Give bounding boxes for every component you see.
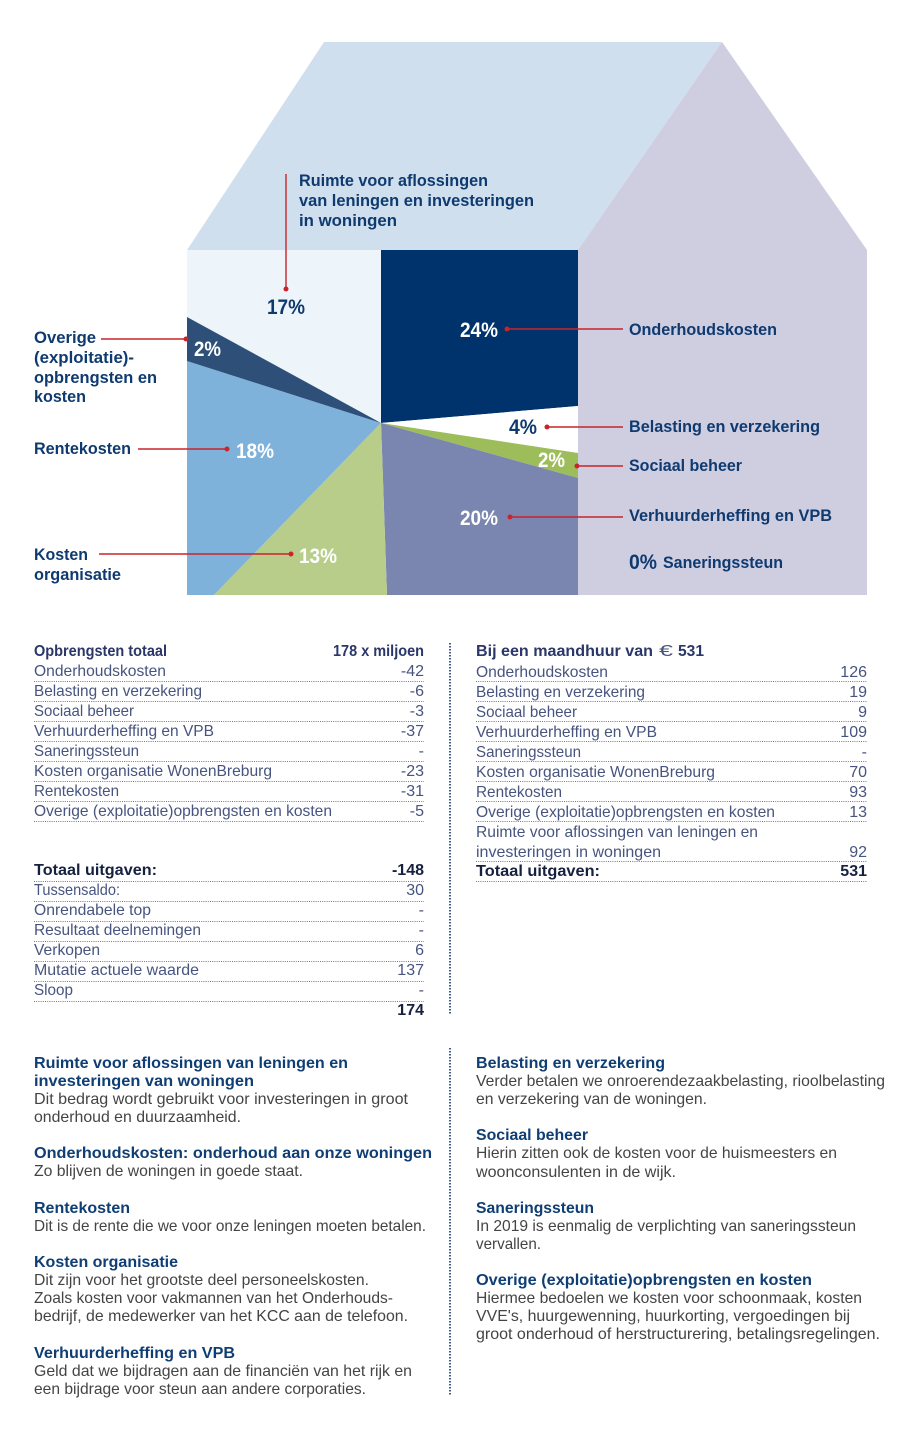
text block: kosten organisatie: Dit zijn voor het grootste deel personeelskosten.: [34, 1272, 369, 1289]
table: maandhuur: 109: [840, 724, 867, 741]
pie slice: belasting 4%: [381, 406, 578, 453]
table: opbrengsten: [34, 643, 424, 1019]
percentage labels: 20%: [460, 507, 498, 530]
table: opbrengsten: -: [419, 982, 424, 999]
text block: belasting en verzekering: en verzekering van de woningen.: [476, 1091, 707, 1108]
table: maandhuur: 126: [840, 664, 867, 681]
table: opbrengsten: 30: [406, 882, 424, 899]
table: opbrengsten: -6: [410, 683, 424, 700]
table: maandhuur: Sociaal beheer: [476, 704, 578, 721]
table: opbrengsten: -31: [401, 783, 424, 800]
roof label: ruimte voor aflossingen: van leningen en investeringen: [299, 191, 534, 210]
right pie labels: Onderhoudskosten: [629, 320, 777, 339]
text block: onderhoudskosten: Zo blijven de woningen in goede staat.: [34, 1163, 303, 1180]
roof label: ruimte voor aflossingen: Ruimte voor aflossingen: [299, 171, 488, 190]
percentage labels: 4%: [509, 416, 537, 439]
table: opbrengsten: -: [419, 902, 424, 919]
percentage labels: 24%: [460, 319, 498, 342]
table: opbrengsten: 6: [415, 942, 424, 959]
text block: sociaal beheer: Hierin zitten ook de kosten voor de huismeesters en: [476, 1145, 837, 1162]
table: maandhuur: 70: [849, 764, 867, 781]
table: opbrengsten: -37: [401, 723, 424, 740]
table: maandhuur: 531: [678, 643, 704, 660]
right pie labels: Verhuurderheffing en VPB: [629, 506, 832, 525]
table: maandhuur: Belasting en verzekering: [476, 684, 645, 701]
right pie labels: Sociaal beheer: [629, 456, 742, 475]
divider: explanations: [449, 1048, 451, 1396]
table: opbrengsten: Rentekosten: [34, 783, 119, 800]
table: opbrengsten: Saneringssteun: [34, 743, 139, 760]
table: maandhuur: -: [862, 744, 867, 761]
table: opbrengsten: -5: [410, 803, 424, 820]
text block: onderhoudskosten: Onderhoudskosten: onderhoud aan onze woningen: [34, 1145, 432, 1162]
text block: ruimte voor aflossingen: [34, 1055, 409, 1126]
text block: belasting en verzekering: [476, 1055, 885, 1108]
percentage labels: 17%: [267, 296, 305, 319]
table: maandhuur: 92: [849, 844, 867, 861]
table: opbrengsten: 137: [397, 962, 424, 979]
left pie labels: opbrengsten en: [34, 368, 157, 387]
pie slice: sociaal beheer 2%: [381, 423, 578, 478]
text block: ruimte voor aflossingen: Ruimte voor aflossingen van leningen en: [34, 1055, 348, 1072]
explanations: right column: [475, 1055, 885, 1343]
left pie labels: (exploitatie)-: [34, 348, 134, 367]
pie slice: rentekosten 18%: [187, 361, 381, 595]
red leader lines: [99, 174, 623, 556]
table: maandhuur: 93: [849, 784, 867, 801]
table: opbrengsten: 178 x miljoen: [333, 643, 424, 660]
left pie labels: Rentekosten: [34, 439, 131, 458]
text block: kosten organisatie: Zoals kosten voor vakmannen van het Onderhouds-: [34, 1290, 393, 1307]
table: maandhuur: Saneringssteun: [476, 744, 581, 761]
table: opbrengsten: Mutatie actuele waarde: [34, 962, 199, 979]
text block: sociaal beheer: Sociaal beheer: [476, 1127, 588, 1144]
table: maandhuur: Rentekosten: [476, 784, 562, 801]
text block: saneringssteun: Saneringssteun: [476, 1200, 594, 1217]
roof label: ruimte voor aflossingen: in woningen: [299, 211, 397, 230]
text block: overige: Overige (exploitatie)opbrengsten en kosten: [476, 1272, 812, 1289]
pie slice: kosten organisatie 13%: [214, 423, 387, 595]
text block: overige: VVE's, huurgewenning, huurkorting, vergoedingen bij: [476, 1308, 850, 1325]
table: opbrengsten: -3: [410, 703, 424, 720]
text block: rentekosten: [34, 1200, 426, 1235]
text block: saneringssteun: vervallen.: [476, 1236, 541, 1253]
table: maandhuur: Ruimte voor aflossingen van leningen en: [476, 824, 758, 841]
house: right side wall: [578, 42, 867, 595]
text block: overige: Hiermee bedoelen we kosten voor schoonmaak, kosten: [476, 1290, 862, 1307]
percentage labels: 13%: [299, 545, 337, 568]
left pie labels: Kosten: [34, 545, 88, 564]
pie slice: verhuurderheffing 20%: [381, 423, 578, 595]
text block: belasting en verzekering: Belasting en verzekering: [476, 1055, 665, 1072]
text block: kosten organisatie: bedrijf, de medewerker van het KCC aan de telefoon.: [34, 1308, 408, 1325]
table: maandhuur: 19: [849, 684, 867, 701]
text block: kosten organisatie: Kosten organisatie: [34, 1254, 178, 1271]
table: opbrengsten: Kosten organisatie WonenBreburg: [34, 763, 272, 780]
table: opbrengsten: Tussensaldo:: [34, 882, 120, 899]
pie slice: overige 2%: [187, 317, 381, 423]
text block: ruimte voor aflossingen: onderhoud en duurzaamheid.: [34, 1109, 241, 1126]
table: maandhuur: investeringen in woningen: [476, 844, 661, 861]
table: maandhuur: [476, 643, 867, 882]
pie slice: onderhoudskosten 24%: [381, 250, 578, 423]
table: opbrengsten: Verkopen: [34, 942, 100, 959]
roof: left plane: [187, 42, 722, 250]
house with pie chart: [187, 42, 867, 595]
text block: overige: groot onderhoud of herstructurering, betalingsregelingen.: [476, 1326, 880, 1343]
roof label: ruimte voor aflossingen: [299, 171, 534, 230]
text block: rentekosten: Rentekosten: [34, 1200, 130, 1217]
table: opbrengsten: Overige (exploitatie)opbrengsten en kosten: [34, 803, 332, 820]
left pie labels: Overige: [34, 328, 96, 347]
table: opbrengsten: Onrendabele top: [34, 902, 151, 919]
table: maandhuur: Kosten organisatie WonenBreburg: [476, 764, 715, 781]
table: opbrengsten: Totaal uitgaven:: [34, 862, 157, 879]
table: maandhuur: Onderhoudskosten: [476, 664, 608, 681]
text block: verhuurderheffing: Geld dat we bijdragen aan de financiën van het rijk en: [34, 1363, 412, 1380]
percentage labels: [194, 296, 565, 568]
table: maandhuur: 9: [858, 704, 867, 721]
table: maandhuur: Bij een maandhuur van: [476, 643, 653, 660]
text block: verhuurderheffing: Verhuurderheffing en VPB: [34, 1345, 235, 1362]
percentage labels: 2%: [194, 338, 221, 361]
table: maandhuur: 13: [849, 804, 867, 821]
text block: saneringssteun: In 2019 is eenmalig de verplichting van saneringssteun: [476, 1218, 856, 1235]
percentage labels: 18%: [236, 440, 274, 463]
table: opbrengsten: -23: [401, 763, 424, 780]
text block: rentekosten: Dit is de rente die we voor onze leningen moeten betalen.: [34, 1218, 426, 1235]
table: maandhuur: Verhuurderheffing en VPB: [476, 724, 657, 741]
left pie labels: organisatie: [34, 565, 121, 584]
table: opbrengsten: -42: [401, 663, 424, 680]
table: opbrengsten: Belasting en verzekering: [34, 683, 202, 700]
text block: belasting en verzekering: Verder betalen we onroerendezaakbelasting, rioolbelasting: [476, 1073, 885, 1090]
explanations: left column: [34, 1055, 432, 1398]
table: opbrengsten: Resultaat deelnemingen: [34, 922, 201, 939]
table: opbrengsten: 174: [397, 1002, 424, 1019]
right pie labels: 0%: [629, 551, 657, 574]
table: opbrengsten: Opbrengsten totaal: [34, 643, 167, 660]
table: opbrengsten: Sloop: [34, 982, 73, 999]
table: opbrengsten: Sociaal beheer: [34, 703, 135, 720]
text block: verhuurderheffing: een bijdrage voor steun aan andere corporaties.: [34, 1381, 366, 1398]
percentage labels: 2%: [538, 449, 565, 472]
table: opbrengsten: -: [419, 743, 424, 760]
pie slice: ruimte 17%: [187, 250, 381, 423]
table: opbrengsten: Verhuurderheffing en VPB: [34, 723, 214, 740]
table: maandhuur: €: [659, 643, 673, 660]
text block: kosten organisatie: [34, 1254, 408, 1325]
table: opbrengsten: -148: [392, 862, 424, 879]
text block: saneringssteun: [476, 1200, 856, 1253]
divider: tables: [449, 643, 451, 1015]
table: maandhuur: Overige (exploitatie)opbrengsten en kosten: [476, 804, 775, 821]
table: maandhuur: 531: [840, 863, 867, 880]
table: opbrengsten: Onderhoudskosten: [34, 663, 166, 680]
text block: sociaal beheer: [475, 1127, 837, 1181]
table: maandhuur: Totaal uitgaven:: [476, 863, 600, 880]
right pie labels: [629, 320, 832, 574]
text block: sociaal beheer: woonconsulenten in de wijk.: [475, 1164, 676, 1181]
left pie labels: [34, 328, 157, 584]
text block: verhuurderheffing: [34, 1345, 412, 1398]
text block: overige: [476, 1272, 880, 1343]
text block: onderhoudskosten: [34, 1145, 432, 1180]
table: opbrengsten: -: [419, 922, 424, 939]
text block: ruimte voor aflossingen: Dit bedrag wordt gebruikt voor investeringen in groot: [34, 1091, 409, 1108]
text block: ruimte voor aflossingen: investeringen van woningen: [34, 1073, 254, 1090]
right pie labels: Belasting en verzekering: [629, 417, 820, 436]
right pie labels: Saneringssteun: [663, 553, 783, 572]
left pie labels: kosten: [34, 387, 86, 406]
